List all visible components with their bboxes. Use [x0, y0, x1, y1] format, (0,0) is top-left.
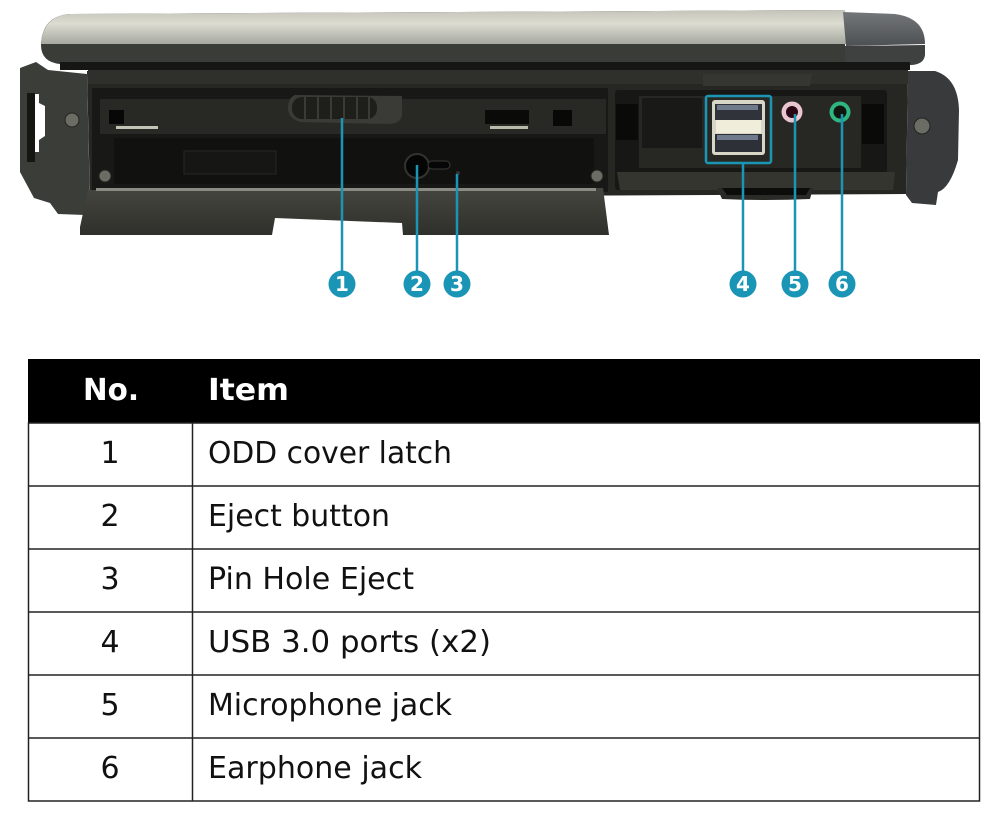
callout 5	[782, 114, 808, 298]
table grid	[28, 423, 980, 801]
row 4: 4	[100, 625, 120, 660]
callout 4	[706, 96, 771, 298]
table header: Item	[208, 373, 289, 408]
callout 6: 6	[835, 272, 849, 296]
row 6: 6	[100, 751, 120, 786]
row 6	[100, 751, 423, 786]
callout 6	[828, 114, 856, 298]
callout 5: 5	[788, 272, 802, 296]
laptop side view photo	[20, 10, 959, 235]
row 2	[100, 499, 390, 534]
ODD cover flap	[80, 188, 609, 235]
row 5	[100, 688, 453, 723]
row 5: Microphone jack	[208, 688, 453, 723]
earphone jack	[830, 102, 850, 122]
row 3: 3	[100, 562, 120, 597]
row 5: 5	[100, 688, 120, 723]
callout 1: 1	[335, 272, 349, 296]
callout 4: 4	[736, 272, 750, 296]
hinge slot	[27, 93, 45, 162]
row 3	[100, 562, 414, 597]
screws	[65, 113, 930, 182]
table header	[28, 359, 980, 423]
USB ports	[712, 100, 765, 155]
callout 1	[328, 118, 356, 298]
table header: No.	[83, 373, 139, 408]
row 3: Pin Hole Eject	[208, 562, 414, 597]
eject button	[405, 154, 460, 178]
parts table	[28, 359, 980, 801]
callout 2	[404, 165, 430, 298]
microphone jack	[782, 102, 802, 122]
callout 3: 3	[450, 272, 464, 296]
row 2: Eject button	[208, 499, 390, 534]
lid	[41, 10, 925, 70]
ODD bay	[92, 88, 608, 192]
right port bay	[615, 74, 895, 200]
left hinge	[20, 62, 90, 215]
row 4: USB 3.0 ports (x2)	[208, 625, 491, 660]
row 6: Earphone jack	[208, 751, 423, 786]
right end cap	[906, 71, 959, 205]
row 1: ODD cover latch	[208, 436, 452, 471]
callout 3	[444, 174, 470, 298]
main body	[87, 71, 908, 198]
row 1	[100, 436, 452, 471]
callout 2: 2	[410, 272, 424, 296]
row 1: 1	[100, 436, 120, 471]
latch	[288, 95, 402, 124]
row 2: 2	[100, 499, 120, 534]
